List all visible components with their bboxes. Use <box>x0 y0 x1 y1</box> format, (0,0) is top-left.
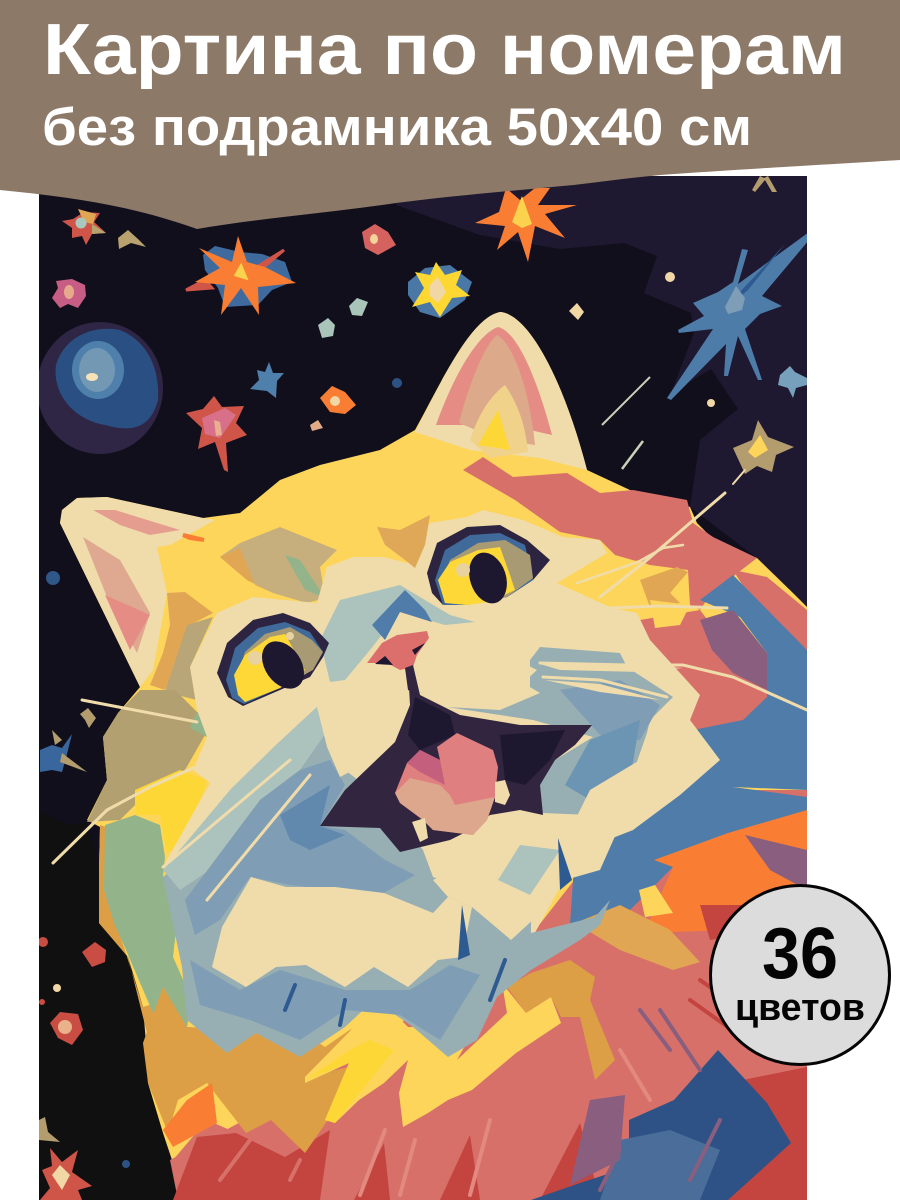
subtitle: без подрамника 50х40 см <box>42 98 752 157</box>
fur streaks <box>220 960 770 1195</box>
whiskers <box>53 470 807 900</box>
mouth and tongue <box>320 690 592 852</box>
painting: cosmic cat <box>37 176 809 1200</box>
left head colouring <box>87 527 337 1077</box>
left ear <box>60 497 215 687</box>
top ear <box>415 312 587 470</box>
right eye <box>427 525 550 608</box>
upper right pink and yellow fur <box>463 457 807 970</box>
badge: 36 colours: цветов <box>735 987 865 1029</box>
night sky background <box>39 176 807 1200</box>
stars <box>38 176 809 1200</box>
badge: 36 colours: 36 <box>762 914 838 994</box>
left eye <box>217 613 329 706</box>
planet <box>37 322 163 454</box>
header banner <box>0 0 900 229</box>
title: Картина по номерам <box>43 10 846 90</box>
lower fur: pink, red, blue <box>143 960 807 1200</box>
nose <box>367 631 429 695</box>
badge: 36 colours <box>710 886 890 1064</box>
cat body silhouette <box>60 312 807 1200</box>
face fur <box>163 510 720 1057</box>
